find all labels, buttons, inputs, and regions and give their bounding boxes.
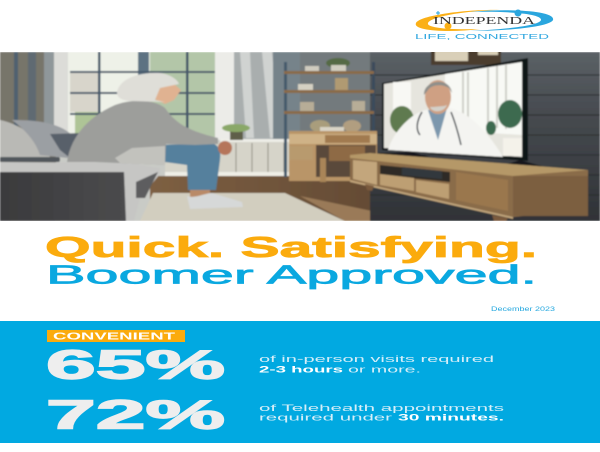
blue statistics panel [0,321,600,443]
stat 72 description: of Telehealth appointments [259,403,505,414]
date: December 2023 [491,307,556,313]
floor and rug [142,175,371,221]
tag: convenient: CONVENIENT [53,332,175,342]
sofa [0,120,160,221]
right room wall and shelves [284,52,600,221]
woman: sweater hem [115,146,165,165]
framed pictures [431,50,501,65]
television with doctor on screen [382,58,528,161]
plant on windowsill [222,124,250,140]
woman: legs and shoe [187,190,243,209]
left room background with window and curtains [0,52,300,221]
side cabinet [289,131,377,182]
woman: sweater [67,101,218,165]
logo: Independa: INDEPENDA [433,16,536,27]
logo: Independa: LIFE, CONNECTED [415,32,550,41]
woman: face [155,84,182,104]
stat 65 description: 2-3 hours [259,364,343,376]
tag: convenient [47,330,185,342]
stat 65 description: or more. [348,364,421,376]
television stand [350,152,588,221]
stat 65 description: of in-person visits required [259,354,494,365]
stat 72 description: required under [259,412,392,424]
woman: hair [117,73,179,102]
logo: Independa [415,10,553,41]
stat: 65 percent: 65% [46,342,225,388]
stat 72 description: 30 minutes. [398,412,504,424]
stat: 72 percent: 72% [46,392,225,438]
heading line 1: Quick. Satisfying. [45,232,537,264]
heading line 2: Boomer Approved. [46,260,537,290]
photo: woman on a sofa watching a doctor on a wall television [0,50,600,221]
woman: jeans [160,143,220,190]
woman: hand [218,141,232,155]
